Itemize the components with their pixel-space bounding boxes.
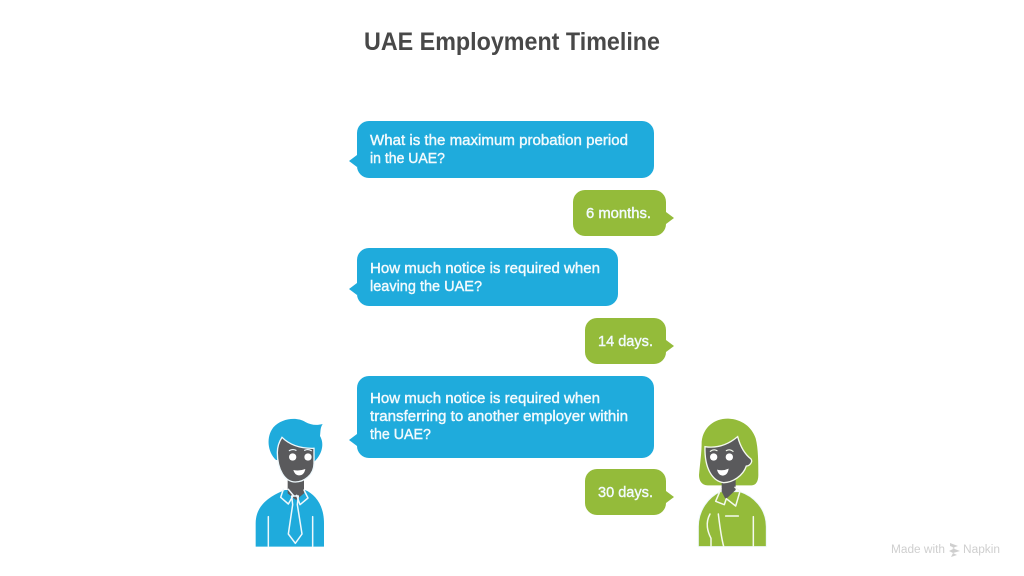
question bubble: probation period: What is the maximum probation period xyxy=(370,132,628,149)
watermark: Made with Napkin: Made with xyxy=(891,544,945,556)
answer bubble: 30 days: 30 days. xyxy=(598,484,653,501)
watermark: Made with Napkin: Napkin xyxy=(963,544,1000,556)
answer bubble: 6 months: 6 months. xyxy=(586,205,651,222)
title: UAE Employment Timeline xyxy=(364,28,660,56)
answer bubble: 6 months xyxy=(573,190,674,236)
question bubble: notice when transferring: transferring to another employer within xyxy=(370,408,628,425)
question bubble: notice when leaving: leaving the UAE? xyxy=(370,278,482,295)
question bubble: notice when leaving: How much notice is required when xyxy=(370,260,600,277)
answer bubble: 14 days: 14 days. xyxy=(598,333,653,350)
icon: woman in green jacket xyxy=(698,419,766,547)
icon: Napkin logo xyxy=(949,543,960,557)
icon: man in blue shirt and tie xyxy=(256,419,324,547)
answer bubble: 14 days xyxy=(585,318,674,364)
watermark: Made with Napkin xyxy=(891,543,1000,557)
answer bubble: 30 days xyxy=(585,469,674,515)
question bubble: notice when transferring: How much notice is required when xyxy=(370,390,600,407)
question bubble: probation period: in the UAE? xyxy=(370,150,445,167)
question bubble: notice when transferring xyxy=(349,376,654,458)
question bubble: probation period xyxy=(349,121,654,178)
question bubble: notice when leaving xyxy=(349,248,618,306)
question bubble: notice when transferring: the UAE? xyxy=(370,426,431,443)
